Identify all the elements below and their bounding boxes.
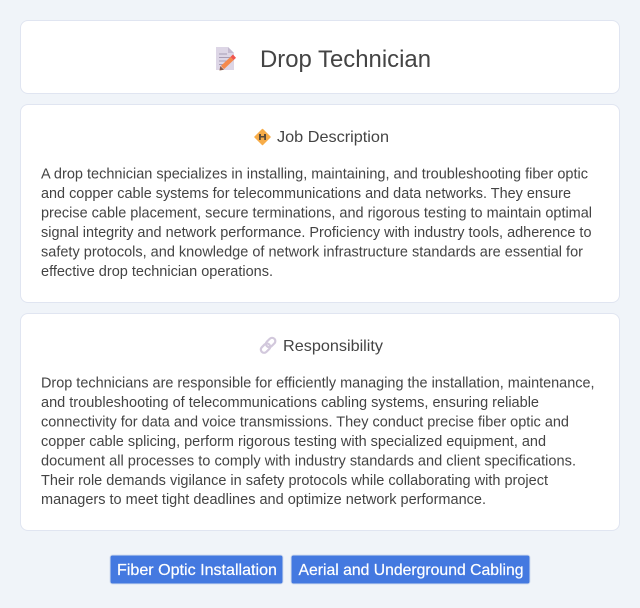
text block: responsibility: document all processes to comply with industry standards and client specifications. xyxy=(41,453,576,469)
tag: aerial and underground cabling xyxy=(291,555,530,584)
text block: responsibility: connectivity for data and voice transmissions. They conduct precise fiber optic and xyxy=(41,414,569,430)
text block: job description: safety protocols, and knowledge of network infrastructure standards are essential for xyxy=(41,244,583,260)
text block: job description: and copper cable systems for telecommunications and data networks. They ensure xyxy=(41,186,571,202)
panel: responsibility card xyxy=(20,313,620,531)
tag: fiber optic installation xyxy=(110,555,283,584)
panel: title card xyxy=(20,20,620,94)
text block: job description: precise cable placement, secure terminations, and rigorous testing to maintain optimal xyxy=(41,205,592,221)
text block: responsibility: and troubleshooting of telecommunications cabling systems, ensuring reliable xyxy=(41,395,539,411)
text block: job description: effective drop technician operations. xyxy=(41,264,273,280)
tag: aerial and underground cabling: Aerial and Underground Cabling xyxy=(298,562,524,579)
heading: job description: Job Description xyxy=(277,129,389,146)
icon: chain link xyxy=(259,336,277,354)
tag: fiber optic installation: Fiber Optic Installation xyxy=(117,562,277,579)
text block: job description: A drop technician specializes in installing, maintaining, and troubleshooting fiber optic xyxy=(41,166,588,182)
icon: orange warning diamond xyxy=(255,130,270,144)
text block: responsibility: Drop technicians are responsible for efficiently managing the installation, maintenance, xyxy=(41,376,594,392)
text block: responsibility: Their role demands vigilance in safety protocols while collaborating with project xyxy=(41,473,548,489)
panel: job description card xyxy=(20,104,620,303)
title: Drop Technician xyxy=(260,46,431,73)
text block: responsibility xyxy=(41,376,594,508)
text block: responsibility: managers to meet tight deadlines and optimize network performance. xyxy=(41,492,486,508)
text block: responsibility: copper cable splicing, perform rigorous testing with specialized equipment, and xyxy=(41,434,546,450)
text block: job description: signal integrity and network performance. Proficiency with industry tools, adherence to xyxy=(41,225,592,241)
text block: job description xyxy=(41,166,592,280)
icon: document with pencil xyxy=(216,47,234,70)
heading: responsibility: Responsibility xyxy=(283,338,383,355)
